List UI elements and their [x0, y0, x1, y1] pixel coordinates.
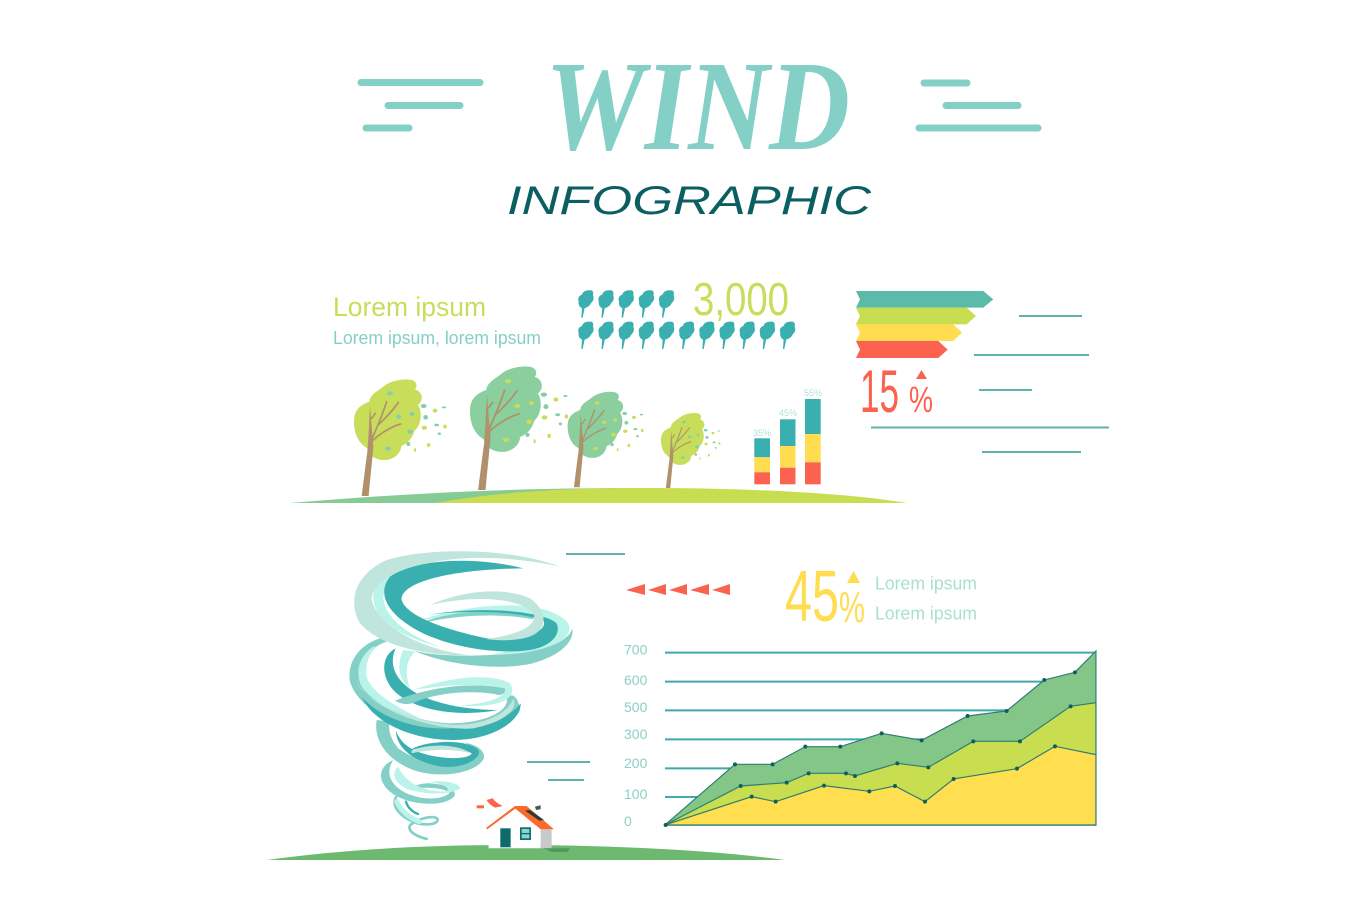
tree 1 [354, 379, 447, 496]
y axis labels: 700 [624, 642, 648, 658]
subtitle: INFOGRAPHIC: INFOGRAPHIC [507, 179, 872, 223]
stat: 45 percent up: 45 [785, 557, 839, 637]
tree 3 [568, 392, 644, 487]
ground: lower hill [267, 845, 785, 860]
house [477, 798, 570, 852]
stacked bar chart [753, 388, 822, 484]
y axis labels: 100 [624, 786, 648, 802]
text block: top heading: Lorem ipsum [333, 292, 486, 322]
house shadow [543, 848, 570, 852]
stacked arrow banners [856, 291, 993, 358]
stat: 15 percent up: % [909, 379, 933, 420]
bar 35%: 35% [753, 428, 771, 438]
grid lines [665, 653, 1096, 797]
door [500, 828, 511, 847]
data points [664, 670, 1077, 827]
band 3 [376, 720, 484, 774]
area: yellow series [665, 746, 1096, 825]
band 1 back [420, 605, 569, 655]
lower tail [395, 797, 438, 839]
text block: stat labels: Lorem ipsum [875, 574, 977, 594]
y axis labels: 200 [624, 755, 648, 771]
band 1 front [413, 628, 573, 667]
bar 55%: 55% [804, 388, 822, 398]
window [520, 827, 531, 840]
wind lines near tornado [527, 554, 625, 780]
y axis labels [624, 642, 648, 829]
text block: top heading: Lorem ipsum, lorem ipsum [333, 328, 541, 348]
tree 2 [470, 366, 568, 490]
roof [486, 806, 554, 829]
house body [489, 808, 541, 848]
number: 3,000: 3,000 [693, 273, 789, 325]
flying debris [477, 798, 503, 808]
area: lime series [665, 703, 1096, 825]
solar panel and chimney [525, 805, 544, 821]
tree 4 [661, 413, 720, 488]
area: dark green series [665, 651, 1096, 825]
text block: top heading [333, 292, 541, 348]
title: WIND: WIND [545, 35, 850, 177]
y axis labels: 0 [624, 813, 632, 829]
stat: 15 percent up: 15 [860, 358, 899, 425]
band 4 [381, 760, 455, 804]
trees bending in wind [354, 366, 720, 496]
pictogram: tree icons [578, 290, 795, 349]
text block: stat labels [875, 574, 977, 624]
stat: 45 percent up: % [839, 583, 865, 632]
ground: top hills [290, 488, 907, 503]
wind lines right of title [919, 83, 1038, 128]
y axis labels: 500 [624, 699, 648, 715]
y axis labels: 300 [624, 726, 648, 742]
text block: stat labels: Lorem ipsum [875, 604, 977, 624]
tornado [349, 551, 573, 839]
band 2 [349, 638, 520, 737]
area chart [624, 642, 1096, 829]
data lines right of arrows [871, 316, 1109, 452]
bar 45%: 45% [779, 408, 797, 418]
y axis labels: 600 [624, 672, 648, 688]
red direction arrows [626, 584, 730, 595]
wind lines left of title [361, 82, 480, 128]
